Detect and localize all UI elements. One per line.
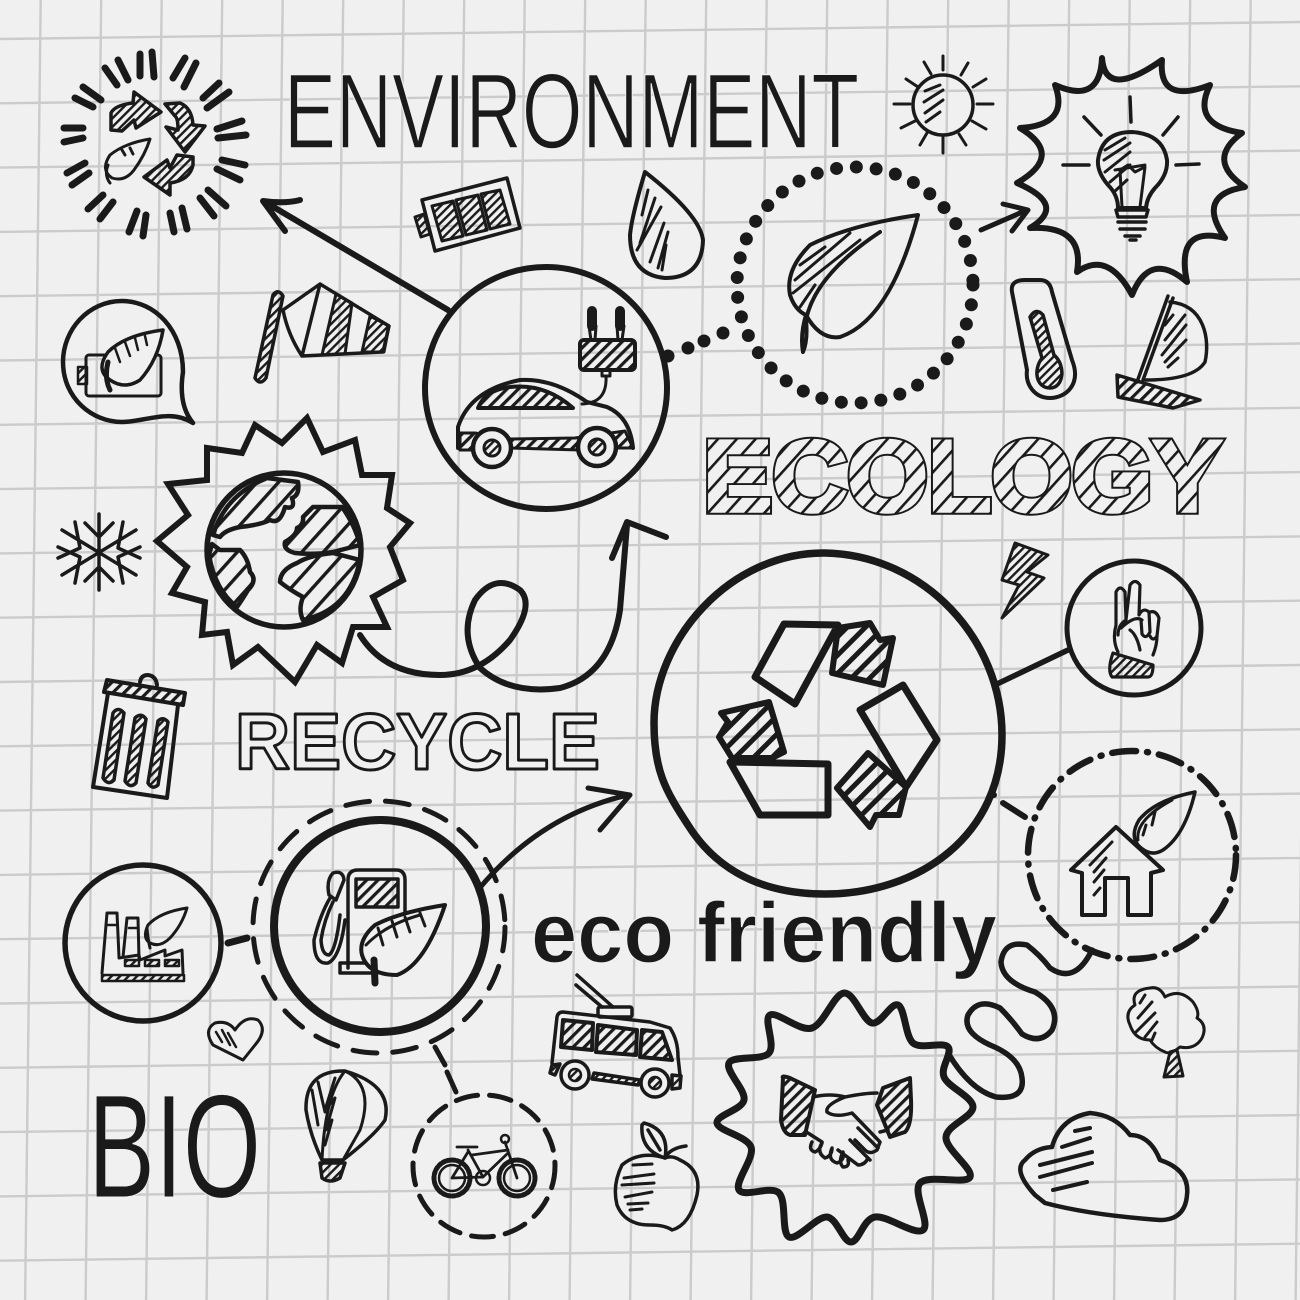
connector: wavy line from handshake to house circle	[948, 944, 1092, 1097]
heading: ECOLOGY: ECOLOGY	[703, 421, 1222, 533]
connector: fuel circle to bicycle circle	[435, 1047, 456, 1092]
heading: RECYCLE: RECYCLE	[235, 697, 600, 786]
icon: fuel pump with leaf in dashed circle	[253, 801, 505, 1053]
icon: trash can	[93, 675, 185, 798]
dotted connector: car to leaf	[668, 333, 723, 356]
icon: tree	[1128, 988, 1204, 1077]
connector: factory to fuel circle	[228, 938, 247, 943]
icon: electric car in circle	[425, 267, 667, 509]
arrow: fuel circle to recycling symbol	[478, 788, 630, 890]
arrow: car circle to recycling badge	[263, 200, 448, 310]
icon: thermometer	[1012, 280, 1075, 398]
icon: lightning bolt	[1002, 543, 1048, 618]
icon: heart	[208, 1019, 262, 1060]
title: ENVIRONMENT: ENVIRONMENT	[284, 51, 859, 171]
heading: BIO: BIO	[88, 1065, 261, 1229]
icon: peace hand in circle	[1067, 561, 1201, 695]
connector: recycling to house circle	[994, 795, 1025, 817]
icon: apple	[615, 1123, 698, 1230]
icon: wind sock flag	[255, 284, 389, 382]
icon: earth in spiky burst	[157, 418, 410, 682]
heading: ECOLOGY: ECOLOGY	[703, 421, 1222, 533]
icon: factory in circle	[65, 865, 221, 1021]
icon: light bulb in starburst	[1017, 58, 1245, 295]
icon: leaf battery speech bubble	[63, 301, 193, 423]
icon: recycling badge with radial ticks	[64, 52, 246, 236]
icon: sailboat	[1117, 296, 1207, 408]
icon: large recycling symbol in circle	[654, 553, 1002, 894]
icon: eco house in dash-dot circle	[1028, 751, 1236, 959]
connector: recycling to hand circle	[997, 650, 1068, 684]
arrow: looping from earth to car	[360, 522, 666, 689]
heading: eco friendly: eco friendly	[531, 886, 997, 981]
icon: cloud	[1020, 1113, 1187, 1220]
icon: bicycle in dashed circle	[413, 1095, 555, 1237]
icon: small sun	[894, 56, 993, 153]
icon: handshake in wavy gear	[717, 993, 973, 1242]
arrow: leaf to light bulb	[981, 204, 1028, 231]
icon: hot air balloon	[306, 1071, 386, 1181]
icon: battery	[415, 178, 520, 251]
icon: trolleybus	[550, 975, 681, 1097]
icon: big leaf in dotted circle	[737, 167, 973, 403]
icon: snowflake	[58, 514, 140, 590]
icon: water drop	[630, 172, 703, 278]
